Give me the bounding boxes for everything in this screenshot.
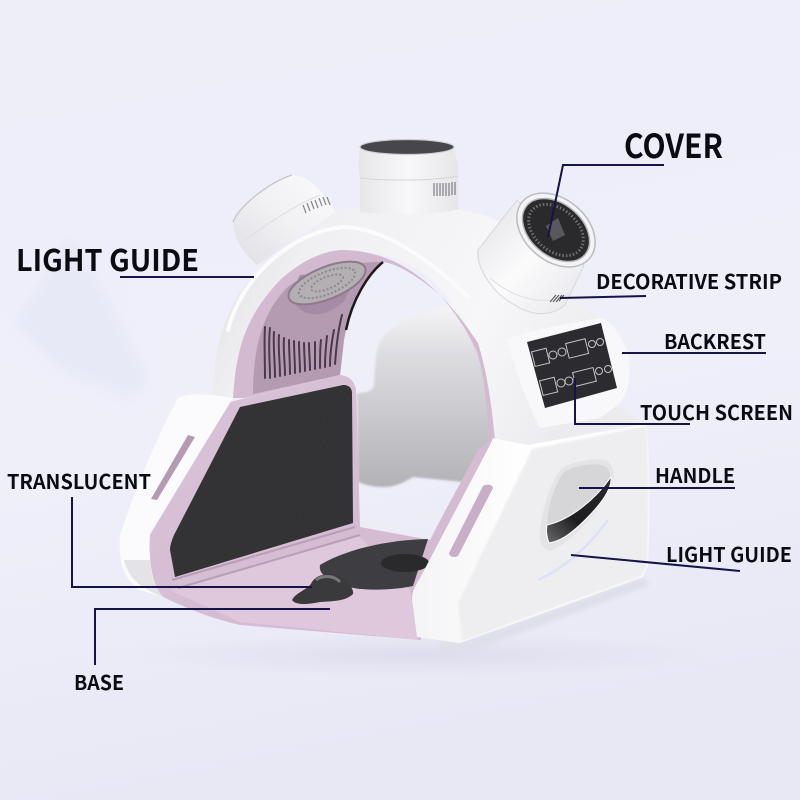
label: light guide top: LIGHT GUIDE [16, 236, 199, 280]
left base shade [124, 560, 163, 597]
heel rest [292, 574, 353, 604]
side light guide strip [538, 520, 608, 580]
top cap [358, 140, 458, 214]
label: translucent: TRANSLUCENT [7, 466, 151, 495]
left cap [233, 175, 335, 265]
leader line: decorative strip [560, 296, 646, 298]
label: decorative strip: DECORATIVE STRIP [596, 266, 782, 295]
label: handle: HANDLE [655, 460, 735, 489]
control bump [507, 318, 630, 428]
label: backrest: BACKREST [664, 326, 766, 355]
arch raised ridge [228, 227, 467, 330]
foot pad [320, 539, 428, 590]
right lamp cap [478, 178, 610, 314]
faint mountain backdrop [14, 232, 150, 400]
decorative strip [550, 295, 564, 302]
pink frame and floor [150, 375, 496, 640]
product: light therapy cabin [120, 140, 650, 652]
leader line: light guide right [571, 555, 740, 571]
touch screen [527, 323, 617, 408]
back mesh pad [170, 385, 353, 577]
leader line: cover [548, 165, 664, 237]
arch shell [213, 208, 640, 447]
ventilation slots [265, 315, 342, 378]
label: touch screen: TOUCH SCREEN [640, 397, 793, 426]
right slot [449, 485, 493, 557]
leader line: backrest [622, 352, 766, 354]
arch inner edge shadow [346, 262, 383, 330]
emitter recess [290, 272, 357, 314]
leader line: base [95, 609, 330, 665]
right body side plane [458, 426, 648, 641]
left side body [120, 394, 233, 597]
leader line: translucent [72, 497, 312, 587]
backrest panel [357, 300, 495, 487]
floor lighter band [170, 535, 418, 640]
arch pink inner rim [233, 250, 495, 440]
floor seam [172, 527, 360, 588]
label: light guide right: LIGHT GUIDE [666, 539, 792, 568]
handle recess [540, 459, 614, 550]
base shadow under right body [440, 577, 650, 652]
label: cover: COVER [624, 120, 723, 168]
floor shadow [130, 633, 710, 677]
emitter mesh [283, 253, 371, 313]
left slot [151, 435, 195, 500]
arch inner dark panel [253, 262, 383, 394]
foot pad vent [381, 554, 429, 572]
label: base: BASE [74, 667, 124, 696]
right side body [412, 424, 649, 643]
leader line: handle [579, 487, 735, 489]
leader line: light guide top [120, 276, 254, 278]
leader line: touch screen [575, 378, 690, 424]
